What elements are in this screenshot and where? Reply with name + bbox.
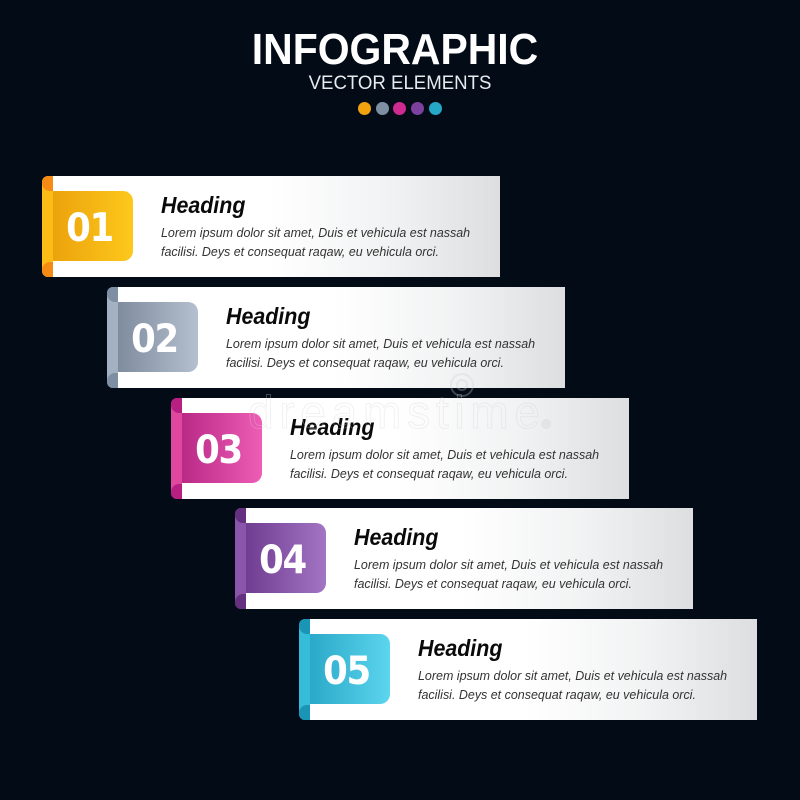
text 01 xyxy=(161,226,470,259)
number tab 05 xyxy=(310,634,390,704)
text 03: Lorem ipsum dolor sit amet, Duis et vehicula est nassah xyxy=(290,448,599,462)
heading 05: Heading xyxy=(418,635,502,661)
text 04: facilisi. Deys et consequat raqaw, eu vehicula orci. xyxy=(354,577,632,591)
panel: step 02 xyxy=(107,287,565,388)
text 03: facilisi. Deys et consequat raqaw, eu vehicula orci. xyxy=(290,467,568,481)
panel: step 03 xyxy=(171,398,629,499)
number tab 04 xyxy=(246,523,326,593)
subtitle: VECTOR ELEMENTS xyxy=(309,73,491,94)
text 05: Lorem ipsum dolor sit amet, Duis et vehicula est nassah xyxy=(418,669,727,683)
text 02: Lorem ipsum dolor sit amet, Duis et vehicula est nassah xyxy=(226,337,535,351)
text 04: Lorem ipsum dolor sit amet, Duis et vehicula est nassah xyxy=(354,558,663,572)
number tab 03 xyxy=(182,413,262,483)
title: INFOGRAPHIC xyxy=(252,25,538,74)
text 02: facilisi. Deys et consequat raqaw, eu vehicula orci. xyxy=(226,356,504,370)
text 05: facilisi. Deys et consequat raqaw, eu vehicula orci. xyxy=(418,688,696,702)
text 04 xyxy=(354,558,663,591)
number tab 03: 03 xyxy=(195,428,242,473)
text 05 xyxy=(418,669,727,702)
text 01: facilisi. Deys et consequat raqaw, eu vehicula orci. xyxy=(161,245,439,259)
heading 01: Heading xyxy=(161,192,245,218)
number tab 05: 05 xyxy=(323,649,370,694)
text 03 xyxy=(290,448,599,481)
number tab 04: 04 xyxy=(259,538,306,583)
heading 03: Heading xyxy=(290,414,374,440)
panel: step 05 xyxy=(299,619,757,720)
text 02 xyxy=(226,337,535,370)
colour dots xyxy=(358,102,442,115)
panel: step 04 xyxy=(235,508,693,609)
number tab 01 xyxy=(53,191,133,261)
number tab 02 xyxy=(118,302,198,372)
heading 02: Heading xyxy=(226,303,310,329)
number tab 01: 01 xyxy=(66,206,113,251)
panel: step 01 xyxy=(42,176,500,277)
text 01: Lorem ipsum dolor sit amet, Duis et vehicula est nassah xyxy=(161,226,470,240)
heading 04: Heading xyxy=(354,524,438,550)
number tab 02: 02 xyxy=(131,317,178,362)
